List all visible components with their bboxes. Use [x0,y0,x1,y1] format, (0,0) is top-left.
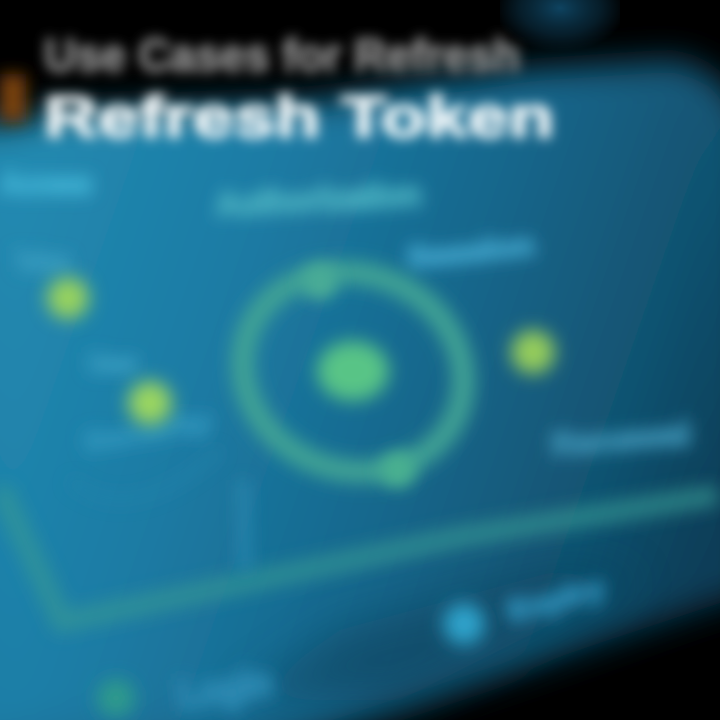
ring node: top [302,264,338,300]
diagram: central ring [214,242,492,502]
curved left connector [70,450,220,499]
title line 2: Refresh Token [44,85,554,150]
label: top centre: Authorization [214,175,422,224]
icon: left green dot [47,277,89,319]
label: top left: Access [0,165,92,201]
label: top right: Session [405,229,536,275]
text labels on panel [0,165,692,717]
label: right: Renewal [549,415,692,463]
icon: blue dot [443,603,485,645]
icon: bottom green blob [97,679,135,717]
icon: right green dot [511,330,555,374]
label: middle left: User [88,348,138,378]
icon: lower left green dot [128,381,172,425]
connector lines [0,450,718,622]
label: bottom right: Expiry [503,571,609,629]
label: left: Token [15,246,70,276]
central green node [317,341,389,401]
icon: orange corner accent [0,74,26,122]
vertical divider [243,480,245,570]
title [44,29,554,150]
lower frame line [0,488,718,622]
label: bottom centre: Login [175,660,275,717]
title line 1: Use Cases for Refresh [44,29,520,81]
ring node: bottom [380,452,416,488]
label: lower left: Security [81,405,215,458]
